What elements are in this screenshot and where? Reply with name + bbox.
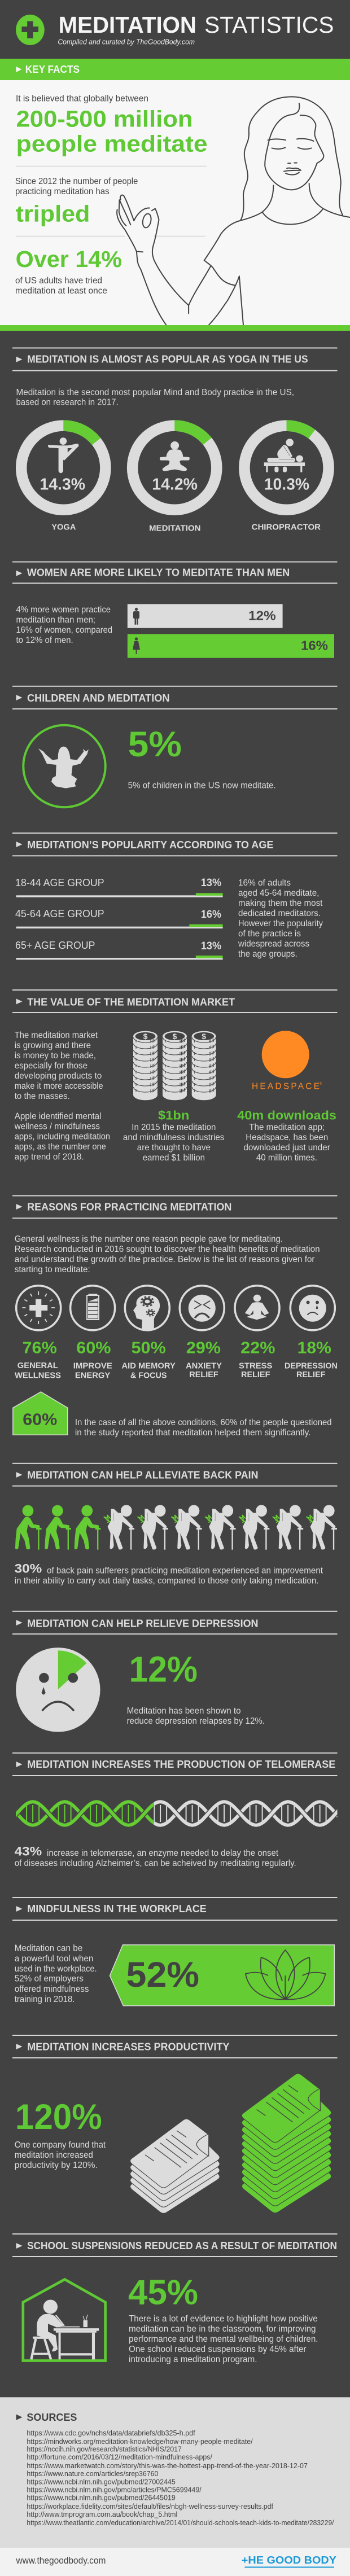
bar: 45-64: 45-64 AGE GROUP	[15, 908, 104, 919]
icon: lotus	[246, 1950, 325, 1999]
heading: market value: THE VALUE OF THE MEDITATION MARKET	[27, 996, 235, 1007]
bar: 45-64	[15, 908, 223, 928]
icon: battery	[71, 1286, 115, 1330]
key facts background	[0, 80, 350, 325]
heading: workplace	[12, 1897, 338, 1921]
text: age commentary: dedicated meditators.	[238, 909, 321, 918]
stat: school 45%	[128, 2273, 318, 2364]
reason: general wellness: 76%	[23, 1339, 57, 1357]
reason: stress relief: RELIEF	[241, 1370, 270, 1379]
logo: plus badge	[16, 15, 45, 45]
text: workplace	[15, 1944, 97, 2004]
text: Apple trend: apps, as the number one	[15, 1142, 106, 1152]
logo: The Good Body: +HE GOOD BODY	[242, 2555, 336, 2566]
fact: 200-500 million	[16, 94, 208, 167]
fact: tripled: Since 2012 the number of people	[15, 177, 138, 186]
reason: stress relief	[235, 1286, 279, 1379]
bar: women 16%	[128, 634, 334, 658]
heading: productivity: MEDITATION INCREASES PRODUCTIVITY	[27, 2041, 229, 2052]
text: telomerase stat: 43%	[15, 1845, 42, 1859]
panel: sources	[0, 2397, 350, 2547]
donut chart: chiropractor	[244, 426, 329, 532]
title	[59, 12, 334, 38]
stat: children 5%: 5%	[128, 725, 182, 764]
text: back pain stat: in their ability to carry out daily tasks, compared to those only taking medication.	[15, 1576, 319, 1585]
text: market intro: The meditation market	[15, 1031, 98, 1040]
coin stack 3	[192, 1031, 216, 1100]
bar: 65+: 13%	[201, 940, 221, 952]
icon: anxious face	[180, 1286, 224, 1330]
icon: wellness cross	[16, 1286, 61, 1330]
bar: 65+	[15, 940, 223, 960]
text: back pain stat: of back pain sufferers practicing meditation experienced an improvement	[47, 1566, 323, 1575]
stat: $1bn: $1bn	[158, 1108, 189, 1122]
stat: school 45%: One school reduced suspensions by 45% after	[129, 2345, 306, 2354]
text: workplace: Meditation can be	[15, 1944, 82, 1953]
icon: woman	[133, 637, 140, 654]
text: workplace: 52% of employers	[15, 1974, 84, 1984]
key facts heading bar: KEY FACTS	[25, 64, 80, 75]
text: reasons intro: Research conducted in 2016 sought to discover the health benefits of meditation	[15, 1245, 320, 1254]
sources list: https://www.theatlantic.com/education/archive/2014/01/should-schools-teach-kids-to-meditate/283229/	[27, 2519, 334, 2527]
reason: stress relief: STRESS	[239, 1361, 272, 1371]
stat: children 5%: 5% of children in the US now meditate.	[128, 781, 276, 791]
text: women vs men: to 12% of men.	[16, 636, 73, 645]
stat: $1bn: and mindfulness industries	[123, 1133, 225, 1142]
text: reasons intro	[15, 1234, 320, 1274]
icon: coin stacks	[133, 1031, 216, 1100]
icon: yoga pose	[48, 437, 78, 473]
callout: 60% helped: in the study reported that meditation helped them significantly.	[75, 1428, 310, 1438]
callout: 60% helped	[13, 1392, 332, 1438]
heading: depression	[12, 1611, 338, 1635]
heading: women vs men: WOMEN ARE MORE LIKELY TO MEDITATE THAN MEN	[27, 567, 290, 579]
bar: 18-44: 13%	[201, 877, 221, 889]
key facts heading bar	[0, 59, 350, 80]
heading: children: CHILDREN AND MEDITATION	[27, 693, 169, 704]
stat: school 45%: 45%	[128, 2273, 198, 2312]
icon: sad face with 12% wedge	[16, 1648, 100, 1732]
donut chart: meditation: 14.2%	[152, 475, 198, 493]
heading: popular as yoga: MEDITATION IS ALMOST AS POPULAR AS YOGA IN THE US	[27, 354, 308, 365]
icon: seated meditator	[160, 441, 190, 471]
bar: men 12%: 12%	[248, 608, 276, 623]
bar: 18-44: 18-44 AGE GROUP	[15, 877, 104, 888]
callout tag: 52%	[110, 1945, 334, 2006]
heading: telomerase: MEDITATION INCREASES THE PRODUCTION OF TELOMERASE	[27, 1759, 335, 1770]
sources list: http://www.tmprogram.com.au/book/chap_5.html	[27, 2511, 177, 2518]
callout tag: 52%: 52%	[126, 1955, 199, 1995]
stat: 40m downloads: downloaded just under	[243, 1143, 330, 1153]
panel: key facts	[0, 59, 350, 325]
sources list: http://fortune.com/2016/03/12/meditation-mindfulness-apps/	[27, 2454, 213, 2461]
heading: depression: MEDITATION CAN HELP RELIEVE DEPRESSION	[27, 1618, 258, 1629]
reason: anxiety relief: 29%	[186, 1339, 221, 1357]
text: age commentary: the age groups.	[238, 949, 298, 959]
sources list: https://nccih.nih.gov/research/statistics/NHIS/2017	[27, 2446, 182, 2454]
sources list: https://www.marketwatch.com/story/this-was-the-hottest-app-trend-of-the-year-2018-12-07	[27, 2462, 308, 2470]
icon: large paper stack	[242, 2074, 331, 2213]
donut chart: meditation: MEDITATION	[149, 523, 201, 533]
text: market intro: is money to be made,	[15, 1051, 96, 1061]
reason: general wellness: GENERAL	[18, 1361, 58, 1370]
bar: 65+: 65+ AGE GROUP	[15, 940, 95, 951]
icon: head with gears	[125, 1286, 169, 1330]
sources list	[27, 2429, 334, 2527]
fact: 200-500 million: people meditate	[16, 131, 208, 157]
heading: reasons: REASONS FOR PRACTICING MEDITATION	[27, 1201, 231, 1212]
stat: 40m downloads	[237, 1108, 336, 1163]
reason: anxiety relief: RELIEF	[189, 1370, 218, 1379]
heading: market value	[12, 989, 338, 1013]
text: women vs men: meditation than men;	[16, 615, 95, 625]
donut chart: chiropractor: CHIROPRACTOR	[252, 523, 321, 532]
text: market intro: is growing and there	[15, 1041, 91, 1050]
text: workplace: training in 2018.	[15, 1995, 75, 2004]
icon: child meditating in ring	[23, 725, 106, 807]
stat: $1bn: In 2015 the meditation	[132, 1123, 216, 1132]
heading: children	[12, 686, 338, 709]
stat: depression 12%	[127, 1649, 265, 1726]
text: yoga intro: Meditation is the second most popular Mind and Body practice in the US,	[16, 388, 294, 397]
text: workplace: used in the workplace.	[15, 1964, 97, 1974]
heading: popularity by age	[12, 833, 338, 856]
heading: telomerase	[12, 1753, 338, 1776]
text: workplace: a powerful tool when	[15, 1954, 93, 1964]
reason: depression relief: RELIEF	[296, 1370, 325, 1379]
heading: back pain	[12, 1463, 338, 1487]
stat: productivity 120%	[15, 2097, 106, 2170]
fact: 200-500 million: 200-500 million	[16, 106, 193, 132]
fact: tripled: practicing meditation has	[15, 187, 110, 196]
icon: man	[133, 608, 139, 625]
bar: 45-64: 16%	[201, 909, 221, 921]
donut chart: yoga: 14.3%	[40, 475, 85, 493]
text: telomerase stat: of diseases including Alzheimer’s, can be acheived by meditating regularly.	[15, 1859, 296, 1868]
text: yoga intro	[16, 388, 294, 408]
text: Apple trend	[14, 1112, 110, 1162]
coin stack 3: $	[202, 1032, 206, 1041]
sources list: https://www.cdc.gov/nchs/data/databriefs/db325-h.pdf	[27, 2429, 195, 2437]
text: market intro: developing products to	[15, 1071, 102, 1081]
stat: productivity 120%: 120%	[15, 2097, 102, 2137]
reason: stress relief: 22%	[240, 1339, 275, 1357]
logo: Headspace	[252, 1031, 322, 1091]
reason: improve energy	[71, 1286, 115, 1381]
reason: memory and focus: AID MEMORY	[122, 1361, 176, 1371]
reason: depression relief	[285, 1286, 338, 1379]
coin stack 2: $	[173, 1032, 177, 1041]
stat: school 45%: introducing a meditation program.	[129, 2355, 257, 2364]
stat: 40m downloads: Headspace, has been	[246, 1133, 328, 1142]
text: reasons intro: General wellness is the number one reason people gave for meditating.	[15, 1234, 283, 1244]
text: workplace: offered mindfulness	[15, 1984, 89, 1994]
sources list: https://www.ncbi.nlm.nih.gov/pubmed/27002445	[27, 2478, 176, 2486]
reason: improve energy: ENERGY	[75, 1371, 110, 1381]
reason: improve energy: IMPROVE	[73, 1361, 112, 1371]
reason: depression relief: DEPRESSION	[285, 1361, 338, 1371]
reason: improve energy: 60%	[76, 1339, 111, 1357]
heading: school suspensions: SCHOOL SUSPENSIONS REDUCED AS A RESULT OF MEDITATION	[27, 2240, 337, 2251]
heading: women vs men	[12, 561, 338, 584]
text: reasons intro: starting to meditate:	[15, 1265, 90, 1274]
donut chart: yoga: YOGA	[51, 523, 76, 532]
footer	[0, 2547, 350, 2576]
green divider band	[0, 325, 350, 331]
sources list: https://mindworks.org/meditation-knowledge/how-many-people-meditate/	[27, 2438, 253, 2446]
sources heading: SOURCES	[27, 2412, 77, 2423]
stat: $1bn: earned $1 billion	[143, 1153, 205, 1163]
heading: popular as yoga	[12, 348, 338, 371]
chart: DNA helix 43% highlighted	[1, 1802, 350, 1825]
coin stack 1: $	[143, 1032, 148, 1041]
stat: 40m downloads: 40 million times.	[256, 1153, 317, 1163]
icon: meditator	[235, 1286, 279, 1330]
callout: 60% helped: 60%	[23, 1410, 57, 1429]
sources list: https://www.ncbi.nlm.nih.gov/pubmed/26445019	[27, 2494, 176, 2501]
stat: productivity 120%: meditation increased	[15, 2150, 93, 2160]
stat: 40m downloads: 40m downloads	[237, 1108, 336, 1122]
fact: over 14%: of US adults have tried	[15, 276, 102, 286]
icon: small paper stack	[130, 2119, 220, 2213]
text: Apple trend: wellness / mindfulness	[14, 1122, 100, 1132]
coin stack 2	[163, 1031, 187, 1100]
stat: productivity 120%: productivity by 120%.	[15, 2161, 98, 2170]
text: market intro	[15, 1031, 103, 1101]
heading: productivity	[12, 2035, 338, 2058]
fact: over 14%: meditation at least once	[15, 286, 107, 296]
icon: student at desk in house	[23, 2279, 106, 2360]
bar chart: age groups	[15, 877, 223, 960]
sources list: https://www.nature.com/articles/srep36760	[27, 2470, 158, 2478]
text: age commentary: making them the most	[238, 899, 323, 908]
stat: school 45%: There is a lot of evidence to highlight how positive	[129, 2314, 318, 2324]
text: market intro: to the masses.	[15, 1092, 70, 1101]
stat: productivity 120%: One company found that	[15, 2140, 106, 2150]
reason: memory and focus: 50%	[131, 1339, 166, 1357]
text: back pain stat	[15, 1562, 323, 1585]
text: reasons intro: and understand the growth of the practice. Below is the list of reasons given for	[15, 1255, 314, 1264]
text: age commentary	[238, 878, 323, 959]
title: STATISTICS	[204, 12, 334, 38]
stat: 40m downloads: The meditation app;	[249, 1123, 325, 1132]
bar: women 16%: 16%	[301, 638, 328, 653]
heading: workplace: MINDFULNESS IN THE WORKPLACE	[27, 1903, 207, 1915]
stat: children 5%	[128, 725, 276, 791]
sources list: https://workplace.fidelity.com/sites/default/files/nbgh-wellness-survey-results.pdf	[27, 2503, 274, 2511]
fact: over 14%	[15, 246, 122, 296]
text: Apple trend: Apple identified mental	[15, 1112, 102, 1121]
fact: tripled: tripled	[16, 201, 90, 227]
bar: men 12%	[128, 604, 283, 628]
stat: depression 12%: Meditation has been shown to	[127, 1706, 241, 1716]
fact: tripled	[15, 177, 205, 238]
fact: 200-500 million: It is believed that globally between	[16, 94, 148, 103]
text: Apple trend: app trend of 2018.	[15, 1153, 84, 1162]
subtitle: Compiled and curated by TheGoodBody.com	[58, 38, 195, 46]
title: MEDITATION	[59, 12, 196, 38]
heading: popularity by age: MEDITATION’S POPULARITY ACCORDING TO AGE	[27, 839, 273, 851]
text: age commentary: However the popularity	[238, 919, 323, 928]
logo: Headspace: HEADSPACE	[252, 1081, 320, 1091]
coin stack 1	[133, 1031, 158, 1100]
stat: school 45%: meditation can be in the classroom, for improving	[129, 2324, 316, 2334]
heading: reasons	[12, 1195, 338, 1219]
text: back pain stat: 30%	[15, 1562, 42, 1576]
text: age commentary: aged 45-64 meditate,	[238, 888, 319, 898]
text: market intro: make it more accessible	[15, 1081, 103, 1091]
text: women vs men: 4% more women practice	[16, 605, 111, 615]
donut chart: yoga	[21, 426, 106, 532]
stat: depression 12%: 12%	[129, 1649, 198, 1689]
reason: memory and focus	[122, 1286, 176, 1381]
reason: memory and focus: & FOCUS	[130, 1371, 167, 1381]
text: women vs men	[16, 605, 112, 645]
reason: anxiety relief	[180, 1286, 224, 1379]
sources list: https://www.ncbi.nlm.nih.gov/pmc/articles/PMC5699449/	[27, 2486, 202, 2494]
reason: general wellness: WELLNESS	[15, 1371, 61, 1381]
callout: 60% helped: In the case of all the above conditions, 60% of the people questioned	[75, 1418, 332, 1427]
text: age commentary: 16% of adults	[238, 878, 291, 888]
text: telomerase stat: increase in telomerase, an enzyme needed to delay the onset	[47, 1848, 279, 1858]
bar: 18-44	[15, 877, 223, 897]
stat: depression 12%: reduce depression relapses by 12%.	[127, 1716, 265, 1726]
text: age commentary: widespread across	[238, 939, 309, 949]
text: market intro: especially for those	[15, 1061, 88, 1071]
text: yoga intro: based on research in 2017.	[16, 398, 119, 408]
logo: Headspace: ®	[320, 1082, 322, 1086]
fact: over 14%: Over 14%	[16, 246, 122, 272]
stat: school 45%: performance and the mental wellbeing of children.	[129, 2334, 318, 2344]
text: women vs men: 16% of women, compared	[16, 625, 112, 635]
icon: sad face	[290, 1286, 335, 1330]
stat: $1bn: are thought to have	[137, 1143, 211, 1153]
stat: $1bn	[123, 1108, 225, 1163]
reason: depression relief: 18%	[298, 1339, 331, 1357]
reason: anxiety relief: ANXIETY	[186, 1361, 222, 1371]
heading: school suspensions	[12, 2233, 338, 2257]
text: age commentary: of the practice is	[238, 929, 301, 939]
illustration: meditating woman	[117, 97, 350, 325]
reason: general wellness	[15, 1286, 61, 1381]
icon: chiropractor treating patient	[264, 439, 305, 472]
text: telomerase stat	[15, 1845, 296, 1868]
heading: back pain: MEDITATION CAN HELP ALLEVIATE BACK PAIN	[27, 1469, 258, 1480]
donut chart: meditation	[133, 426, 217, 533]
pictogram: back pain sufferers	[15, 1505, 337, 1550]
footer URL: www.thegoodbody.com	[16, 2556, 106, 2566]
text: Apple trend: apps, including meditation	[15, 1132, 110, 1142]
donut chart: chiropractor: 10.3%	[264, 475, 309, 493]
